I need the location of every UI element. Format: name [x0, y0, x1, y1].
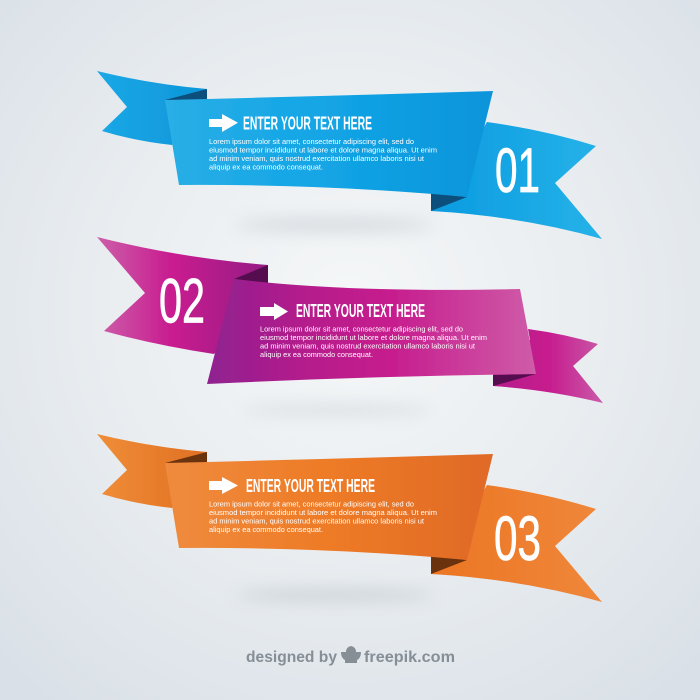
main band	[165, 91, 493, 197]
right fold	[431, 556, 467, 574]
heading: ENTER YOUR TEXT HERE	[243, 112, 372, 134]
right fold	[493, 374, 536, 386]
left tail	[97, 434, 207, 508]
panel: blue ribbon 01	[97, 71, 602, 239]
right tail	[431, 122, 602, 239]
heading: ENTER YOUR TEXT HERE	[296, 300, 425, 321]
right tail	[493, 329, 603, 403]
left fold	[165, 452, 207, 463]
left tail	[97, 71, 207, 145]
body text: ad minim veniam, quis nostrud exercitation ullamco laboris nisi ut	[209, 517, 424, 526]
body text: Lorem ipsum dolor sit amet, consectetur adipiscing elit, sed do	[260, 324, 463, 334]
credit line	[246, 646, 455, 666]
arrow	[209, 477, 238, 494]
body text: eiusmod tempor incididunt ut labore et dolore magna aliqua. Ut enim	[260, 333, 487, 342]
body text: ad minim veniam, quis nostrud exercitation ullamco laboris nisi ut	[209, 154, 424, 163]
body text: ad minim veniam, quis nostrud exercitation ullamco laboris nisi ut	[260, 342, 475, 350]
shadow: blue ribbon	[235, 218, 435, 232]
body text: Lorem ipsum dolor sit amet, consectetur adipiscing elit, sed do	[209, 137, 414, 146]
shadow: orange ribbon	[235, 589, 435, 601]
shadow: magenta ribbon	[243, 404, 433, 416]
panel: magenta ribbon 02	[97, 237, 603, 403]
body text: aliquip ex ea commodo consequat.	[209, 162, 323, 172]
icon: freepik logo	[341, 646, 361, 663]
credit line: designed by	[246, 649, 337, 666]
left fold	[234, 265, 268, 283]
panel: orange ribbon 03	[97, 434, 602, 602]
body text: Lorem ipsum dolor sit amet, consectetur adipiscing elit, sed do	[209, 500, 414, 509]
number 01: 01	[495, 136, 540, 206]
heading: ENTER YOUR TEXT HERE	[246, 475, 375, 496]
main band	[207, 279, 536, 384]
body text	[209, 137, 437, 172]
body text: aliquip ex ea commodo consequat.	[260, 350, 373, 359]
number 02: 02	[159, 266, 205, 336]
right fold	[431, 193, 467, 211]
main band	[165, 454, 493, 560]
body text	[260, 324, 487, 359]
credit line: freepik.com	[364, 649, 455, 666]
arrow	[260, 303, 288, 320]
body text: aliquip ex ea commodo consequat.	[209, 525, 323, 534]
number 03: 03	[494, 504, 541, 574]
body text: eiusmod tempor incididunt ut labore et dolore magna aliqua. Ut enim	[209, 145, 437, 154]
left tail	[97, 237, 268, 354]
right tail	[431, 485, 602, 602]
arrow	[209, 114, 238, 132]
body text: eiusmod tempor incididunt ut labore et dolore magna aliqua. Ut enim	[209, 508, 437, 517]
body text	[209, 500, 437, 534]
left fold	[165, 89, 207, 100]
